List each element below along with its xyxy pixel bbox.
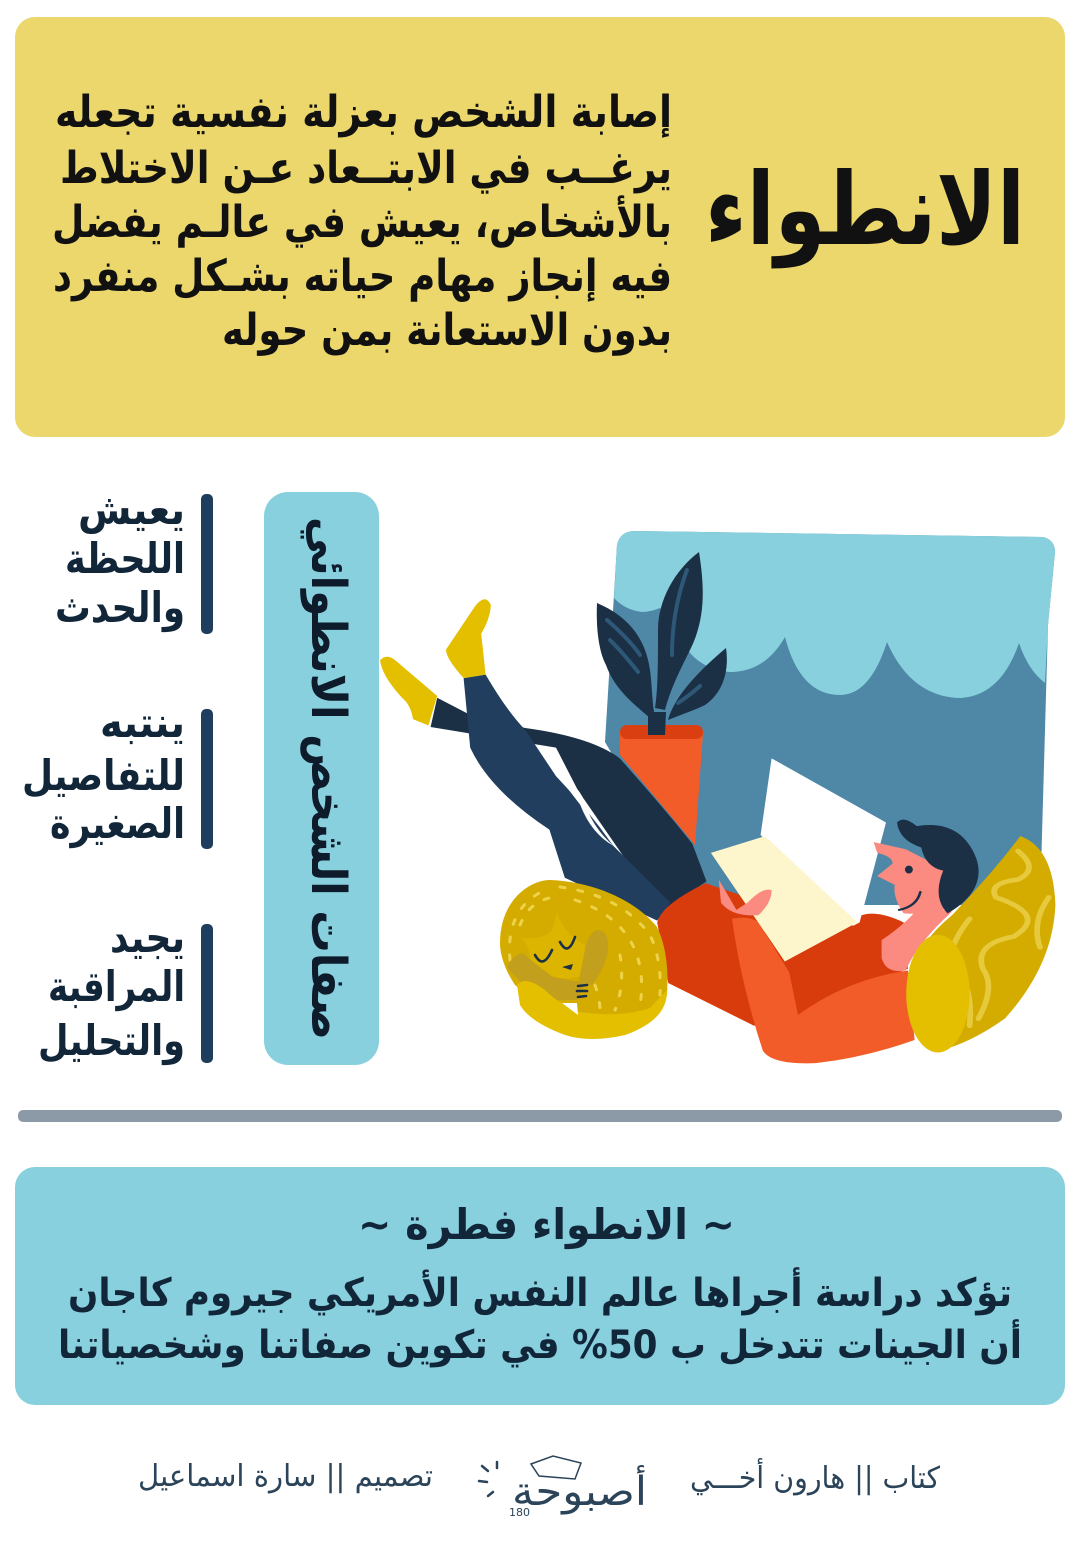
trait: lives the moment: يعيش <box>78 485 185 534</box>
window <box>605 531 1055 905</box>
vertical heading panel: صفات الشخص الانطوائي <box>300 517 356 1040</box>
trait: notices small details: للتفاصيل <box>22 751 185 800</box>
definition text: إصابة الشخص بعزلة نفسية تجعله <box>55 87 672 138</box>
trait: lives the moment <box>55 485 213 634</box>
footer logo <box>479 1456 647 1519</box>
cushion <box>906 836 1055 1052</box>
vertical heading panel <box>264 492 379 1065</box>
trait: lives the moment: والحدث <box>55 583 185 633</box>
panel body text: أن الجينات تتدخل ب 50% في تكوين صفاتنا وشخصياتنا <box>58 1319 1022 1368</box>
definition text <box>52 87 672 356</box>
panel heading: ~ الانطواء فطرة ~ <box>358 1200 735 1250</box>
panel: introversion is innate <box>15 1167 1065 1405</box>
trait: notices small details <box>22 698 213 849</box>
person <box>657 758 979 1063</box>
panel body text <box>58 1267 1022 1368</box>
trait: observes and analyses: والتحليل <box>38 1016 185 1066</box>
traits list <box>22 485 213 1066</box>
footer credit: writer: كتاب || هارون أخـــي <box>690 1457 941 1496</box>
trait: notices small details: الصغيرة <box>50 799 185 849</box>
divider <box>18 1110 1062 1122</box>
definition text: فيه إنجاز مهام حياته بشـكل منفرد <box>53 251 672 302</box>
footer logo: 180 <box>509 1506 530 1519</box>
legs <box>380 599 706 921</box>
footer credit: designer: تصميم || سارة اسماعيل <box>138 1459 433 1494</box>
definition text: بالأشخاص، يعيش في عالـم يفضل <box>52 195 672 248</box>
trait: lives the moment: اللحظة <box>65 534 185 583</box>
panel body text: تؤكد دراسة أجراها عالم النفس الأمريكي جيروم كاجان <box>68 1267 1012 1316</box>
plant <box>597 552 727 845</box>
trait: observes and analyses <box>38 913 213 1066</box>
trait: observes and analyses: المراقبة <box>48 962 185 1012</box>
definition text: يرغــب في الابتــعاد عـن الاختلاط <box>60 143 672 194</box>
trait: observes and analyses: يجيد <box>110 913 185 962</box>
cat <box>500 880 667 1039</box>
footer logo: أصبوحة <box>512 1465 647 1515</box>
illustration: person reading with cat <box>380 531 1055 1063</box>
definition text: بدون الاستعانة بمن حوله <box>222 305 672 356</box>
trait: notices small details: ينتبه <box>100 698 185 747</box>
panel: definition <box>15 17 1065 437</box>
